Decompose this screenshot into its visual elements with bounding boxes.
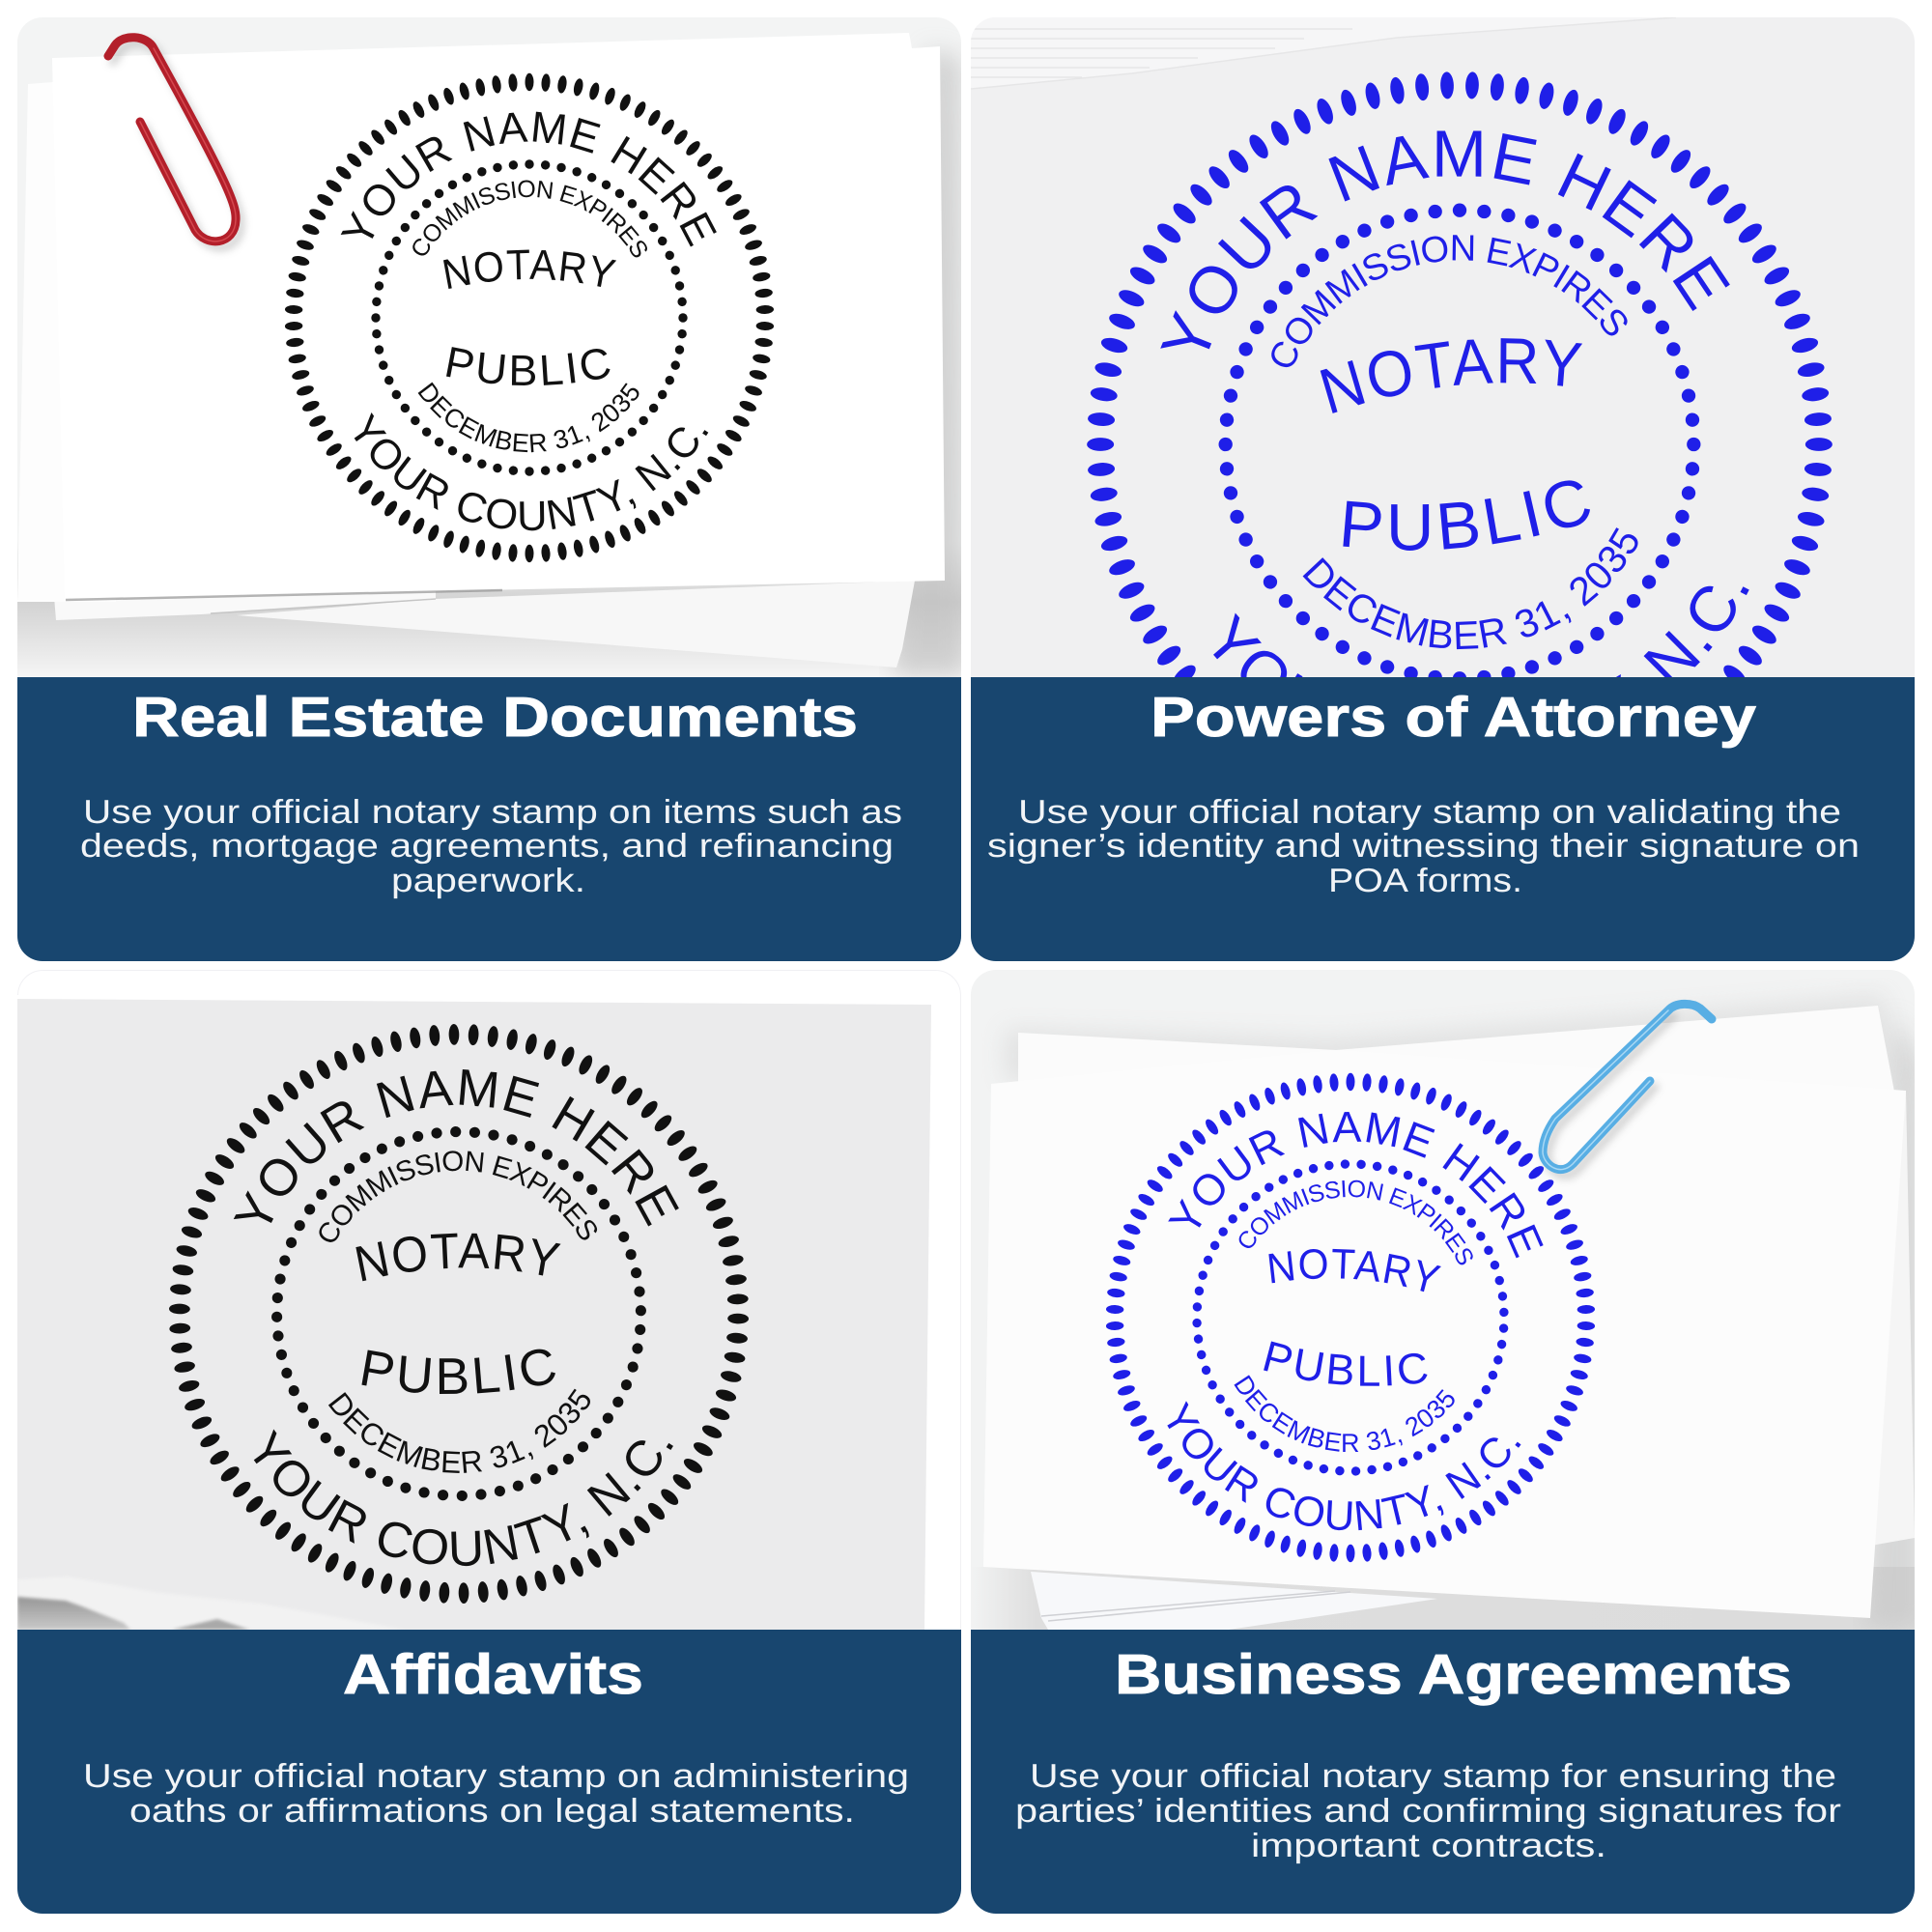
icon: blue paperclip bbox=[1543, 1004, 1712, 1176]
description: paperwork. bbox=[391, 863, 585, 899]
description: deeds, mortgage agreements, and refinancing bbox=[80, 828, 894, 865]
stamp: blue notary seal: COMMISSION EXPIRES bbox=[1271, 235, 1628, 367]
stamp: blue notary seal: YOUR COUNTY, N.C. bbox=[1167, 1401, 1520, 1530]
stamp: blue notary seal bbox=[1105, 1072, 1595, 1563]
panel: business agreements bbox=[971, 970, 1915, 1914]
photo: stacked paper with red paperclip bbox=[17, 17, 961, 677]
stamp: black notary seal: DECEMBER 31, 2035 bbox=[328, 1389, 590, 1473]
heading: Business Agreements bbox=[1115, 1643, 1792, 1706]
description bbox=[83, 1758, 909, 1830]
stamp: blue notary seal: PUBLIC bbox=[1264, 1341, 1428, 1386]
panel: affidavits bbox=[17, 999, 961, 1914]
stamp: black notary seal: NOTARY bbox=[443, 249, 616, 289]
caption bar: powers of attorney bbox=[971, 677, 1915, 961]
stamp: blue notary seal: NOTARY bbox=[1320, 338, 1582, 413]
stamp: black notary seal: COMMISSION EXPIRES bbox=[412, 180, 647, 257]
photo: gray sheet with black stamp bbox=[17, 999, 931, 1630]
stamp: blue notary seal: PUBLIC bbox=[1343, 480, 1590, 551]
description: oaths or affirmations on legal statements. bbox=[129, 1793, 855, 1830]
heading: Powers of Attorney bbox=[1151, 686, 1756, 749]
stamp: blue notary seal: COMMISSION EXPIRES bbox=[1238, 1180, 1473, 1265]
stamp: blue notary seal: YOUR NAME HERE bbox=[1160, 131, 1730, 350]
stamp: blue notary seal: YOUR COUNTY, N.C. bbox=[1213, 585, 1749, 677]
description bbox=[80, 794, 902, 899]
stamp: blue notary seal: DECEMBER 31, 2035 bbox=[1235, 1375, 1455, 1452]
stamp: black notary seal: YOUR NAME HERE bbox=[340, 112, 717, 247]
icon: red paperclip bbox=[108, 38, 241, 247]
caption bar: business agreements bbox=[971, 1630, 1915, 1914]
caption bar: real estate documents bbox=[17, 677, 961, 961]
stamp: black notary seal: YOUR COUNTY, N.C. bbox=[354, 412, 709, 531]
description: parties’ identities and confirming signatures for bbox=[1015, 1793, 1841, 1830]
description: POA forms. bbox=[1328, 863, 1522, 899]
stamp: blue notary seal: NOTARY bbox=[1268, 1248, 1441, 1293]
stamp: black notary seal: DECEMBER 31, 2035 bbox=[417, 383, 639, 452]
description bbox=[1015, 1758, 1841, 1864]
stamp: black notary seal: PUBLIC bbox=[446, 347, 611, 385]
heading: Real Estate Documents bbox=[132, 686, 858, 749]
stamp: black notary seal: PUBLIC bbox=[361, 1349, 555, 1394]
description: Use your official notary stamp on validating the bbox=[1018, 794, 1841, 831]
stamp: blue notary seal: DECEMBER 31, 2035 bbox=[1302, 527, 1638, 649]
description: Use your official notary stamp on administering bbox=[83, 1758, 909, 1795]
stamp: black notary seal: YOUR NAME HERE bbox=[234, 1069, 679, 1227]
description bbox=[988, 799, 1857, 893]
photo: stacked paper with blue paperclip bbox=[971, 970, 1915, 1630]
stamp: black notary seal: COMMISSION EXPIRES bbox=[319, 1151, 597, 1242]
caption bar: affidavits bbox=[17, 1630, 961, 1914]
stamp: black notary seal bbox=[284, 73, 774, 562]
panel: real estate documents bbox=[17, 17, 961, 961]
stamp: black notary seal bbox=[169, 1024, 749, 1604]
description: Use your official notary stamp for ensuring the bbox=[1030, 1758, 1836, 1795]
stamp: black notary seal: YOUR COUNTY, N.C. bbox=[253, 1430, 673, 1567]
panel: powers of attorney bbox=[971, 17, 1915, 961]
photo: paper with blue stamp bbox=[971, 17, 1915, 677]
stamp: black notary seal: NOTARY bbox=[355, 1233, 560, 1281]
description: Use your official notary stamp on items such as bbox=[83, 794, 902, 831]
description: important contracts. bbox=[1251, 1828, 1606, 1864]
stamp: blue notary seal: YOUR NAME HERE bbox=[1168, 1112, 1544, 1258]
heading: Affidavits bbox=[343, 1643, 643, 1706]
description: signer’s identity and witnessing their signature on bbox=[987, 828, 1860, 865]
stamp: blue notary seal bbox=[1087, 71, 1833, 677]
